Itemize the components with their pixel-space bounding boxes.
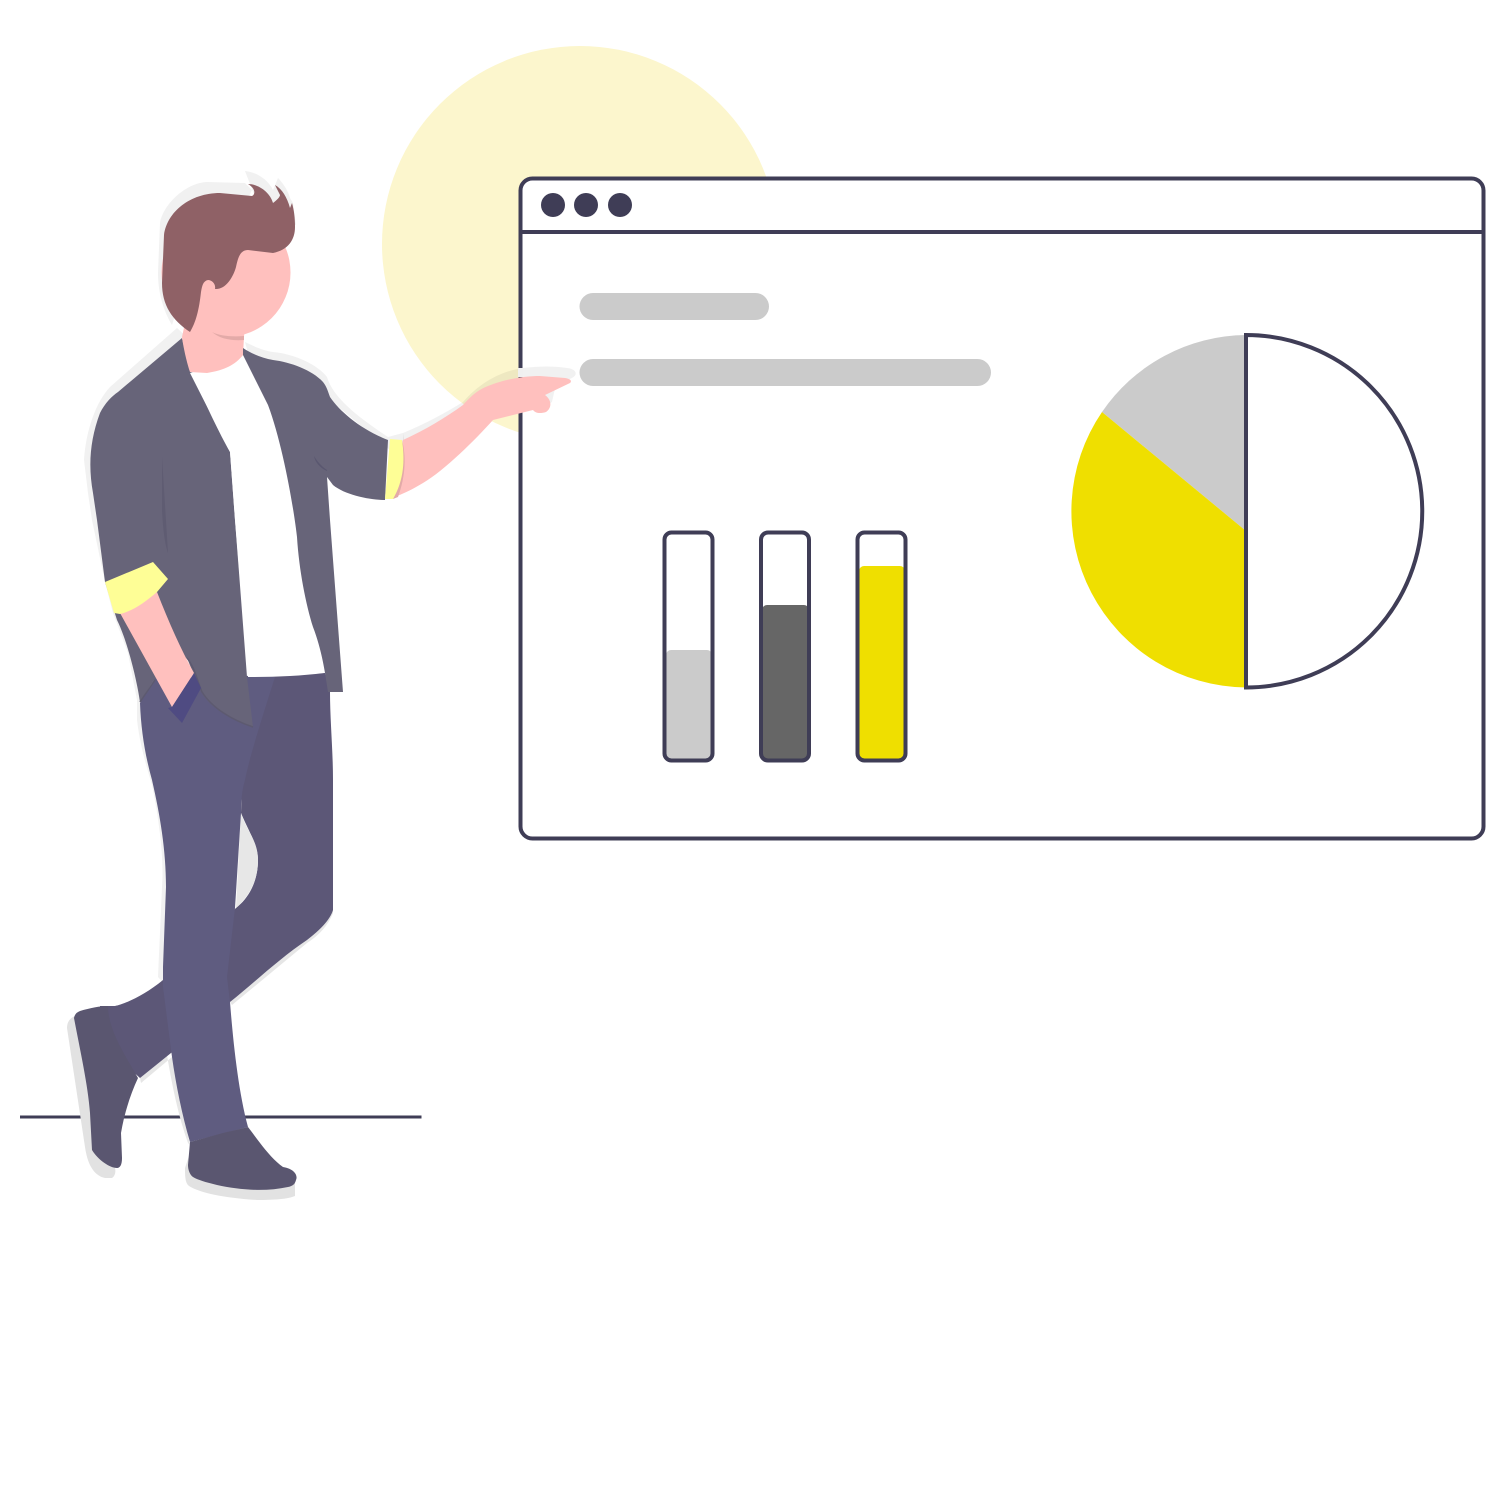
pocket [168,673,201,723]
arm fold [314,456,327,471]
rolled sleeve right [385,439,403,499]
chin shadow [212,332,244,340]
placeholder text bars [580,293,991,386]
pocket arm [120,592,194,707]
jacket left panel [90,338,253,727]
pie chart [1071,335,1422,688]
jacket right panel [243,348,388,692]
person shadow [67,171,576,1200]
ground line [20,1116,422,1118]
rolled sleeve left [105,562,168,614]
t-shirt [190,355,324,677]
pointing forearm [397,376,571,496]
cuff shade [393,440,405,499]
back shoe [74,1006,138,1168]
jacket crease [162,457,168,553]
jacket hem shadow [140,658,253,727]
background yellow circle [382,46,778,442]
person [67,171,576,1200]
window control dots [541,193,632,217]
browser window [520,178,1484,838]
head [162,208,290,337]
back leg [100,673,333,1078]
hair [162,184,295,332]
front shoe [188,1127,297,1190]
neck [182,300,245,373]
inner leg gap shadow [236,813,258,908]
bar chart [664,532,906,760]
front leg [140,677,275,1142]
